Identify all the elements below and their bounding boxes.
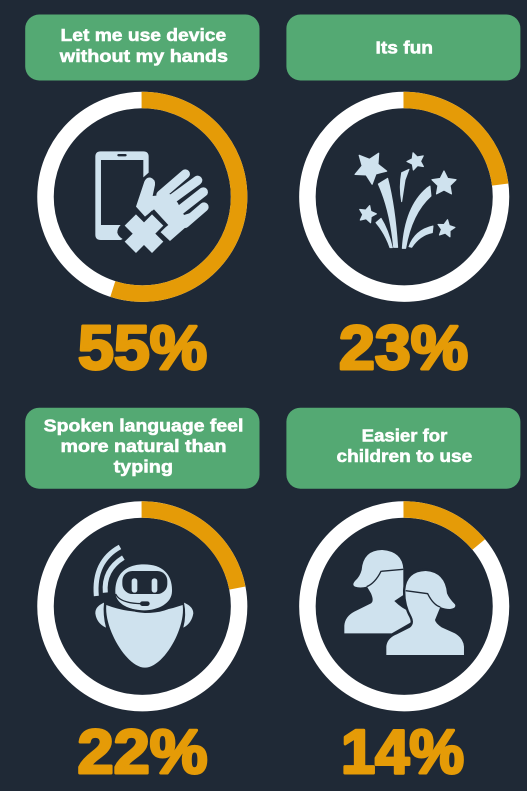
label box: hands free: without my hands: [59, 46, 228, 66]
icon: two children with caps: [344, 550, 464, 655]
icon: fireworks: [350, 145, 456, 248]
label box: its fun: [286, 14, 520, 80]
label box: spoken language: Spoken language feel: [44, 415, 243, 435]
percentage: 22%: 22%: [78, 717, 208, 787]
percentage: 14%: 14%: [341, 717, 464, 787]
donut chart: 14%: [307, 509, 501, 703]
donut chart: 55%: [46, 100, 239, 294]
label box: spoken language: more natural than: [60, 436, 226, 456]
label box: hands free: Let me use device: [60, 25, 226, 45]
donut chart: 22%: [46, 510, 239, 703]
panel: let me use device without my hands: [25, 14, 260, 383]
donut chart: 23%: [307, 100, 501, 294]
label box: hands free: [25, 14, 260, 80]
icon: talking robot: [95, 547, 193, 668]
label box: spoken language: typing: [114, 456, 173, 476]
label box: spoken language: [25, 408, 260, 489]
panel: easier for children to use: [286, 408, 520, 787]
percentage: 23%: 23%: [339, 313, 468, 383]
label box: its fun: Its fun: [376, 37, 433, 57]
panel: spoken language feels more natural: [25, 408, 260, 787]
label box: children: Easier for: [362, 425, 448, 445]
percentage: 55%: 55%: [78, 313, 207, 383]
icon: phone and crossed-out hand: [95, 151, 208, 261]
label box: children: children to use: [336, 446, 473, 466]
label box: children: [286, 408, 520, 489]
panel: its fun: [286, 14, 520, 383]
